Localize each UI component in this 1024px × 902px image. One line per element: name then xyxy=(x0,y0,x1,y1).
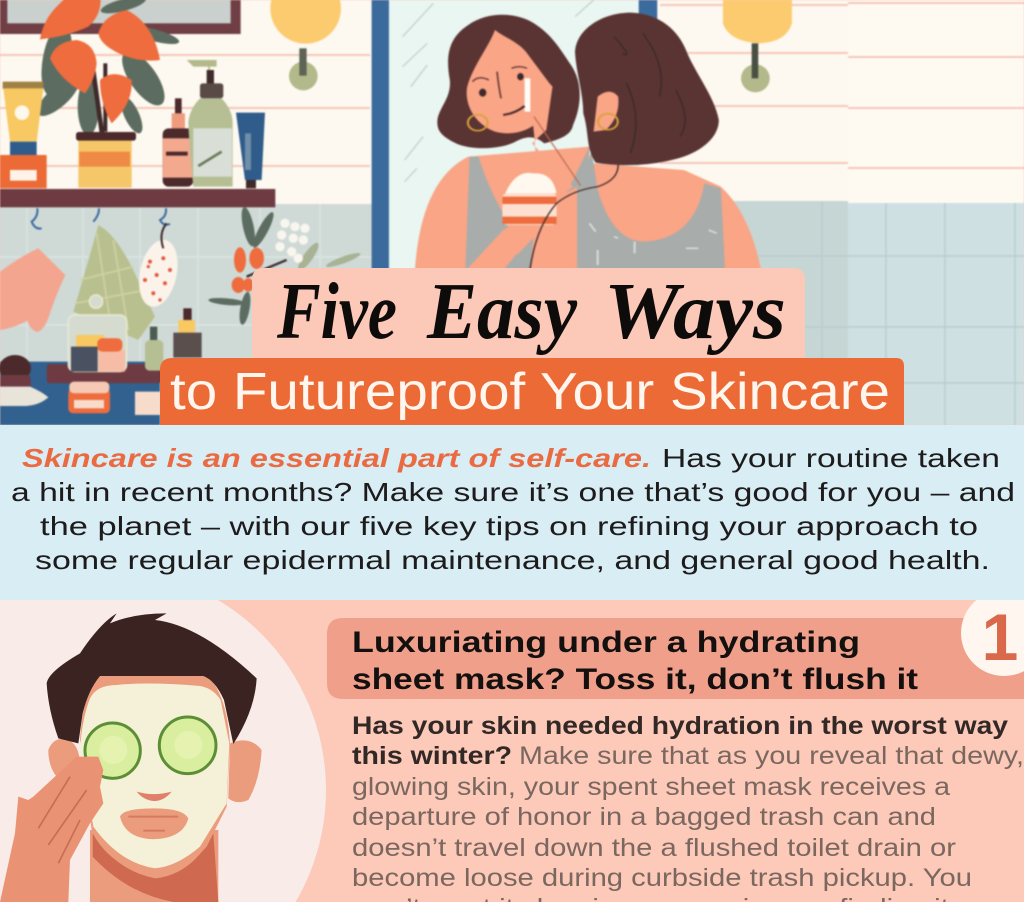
pink bath mitt xyxy=(0,248,65,332)
tray xyxy=(47,364,162,383)
panel: tip 1 sheet mask xyxy=(0,569,1024,902)
number badge xyxy=(961,600,1024,676)
intro text xyxy=(11,443,1015,575)
tip heading: sheet mask? Toss it, don’t flush it xyxy=(352,663,918,696)
panel: intro band xyxy=(0,425,1024,600)
tip body text: this winter? xyxy=(352,742,512,770)
tip heading: Luxuriating under a hydrating xyxy=(352,626,860,659)
heading bar xyxy=(327,618,1024,699)
intro text: some regular epidermal maintenance, and general good health. xyxy=(35,545,990,575)
icon: man with face mask and cucumbers xyxy=(0,613,262,902)
dropper bottle xyxy=(163,98,193,187)
lamp on left wall xyxy=(270,0,341,90)
subtitle text: to Futureproof Your Skincare xyxy=(170,363,890,421)
small bottles xyxy=(145,308,202,371)
small cream jar xyxy=(68,382,110,413)
mirror streaks xyxy=(403,0,594,182)
intro text: Skincare is an essential part of self-care. xyxy=(22,443,651,473)
right wall lamp xyxy=(723,0,792,92)
number badge: 1 xyxy=(982,600,1018,674)
portrait backdrop circle xyxy=(0,569,326,902)
title script text: Ways xyxy=(604,268,786,356)
round brush xyxy=(0,355,48,406)
tip body text: glowing skin, your spent sheet mask receives a xyxy=(352,773,950,801)
pump bottle xyxy=(187,60,233,187)
blue tube xyxy=(236,113,265,188)
tip body text: Make sure that as you reveal that dewy, xyxy=(519,742,1024,770)
cream tube and box xyxy=(0,82,47,188)
illustration: woman at mirror xyxy=(389,0,792,270)
reflected woman xyxy=(415,15,589,270)
mirror frame right post xyxy=(638,0,658,20)
intro text: the planet – with our five key tips on refining your approach to xyxy=(40,511,978,541)
tip body text: become loose during curbside trash pickup. You xyxy=(352,864,972,892)
loofah sponge xyxy=(138,222,178,308)
intro text: Has your routine taken xyxy=(662,443,1000,473)
green towel xyxy=(73,225,155,340)
glass jar with soaps xyxy=(68,295,127,372)
blue counter xyxy=(0,362,160,425)
title script text xyxy=(276,268,786,356)
tip body text: doesn’t travel down the a flushed toilet drain or xyxy=(352,834,956,862)
tip body text xyxy=(351,712,1024,902)
wooden shelf xyxy=(0,189,275,207)
tip body text: Has your skin needed hydration in the worst way xyxy=(352,712,1008,740)
illustration: shelf with plant and cosmetics xyxy=(0,0,389,425)
potted anthurium plant xyxy=(32,0,181,188)
tip body text: departure of honor in a bagged trash can and xyxy=(352,803,936,831)
hero illustration: bathroom background xyxy=(0,0,1024,425)
title script text: Five xyxy=(276,268,397,356)
title block xyxy=(160,268,904,425)
title pink banner xyxy=(252,268,805,358)
title script text: Easy xyxy=(426,268,577,356)
mirror glass xyxy=(389,0,640,270)
intro text: a hit in recent months? Make sure it’s one that’s good for you – and xyxy=(11,477,1015,507)
subtitle orange banner xyxy=(160,358,904,425)
mirror frame left post xyxy=(372,0,389,270)
wall mirror xyxy=(0,0,241,34)
white box xyxy=(135,392,160,415)
tip heading xyxy=(353,630,918,694)
woman seen from behind xyxy=(530,13,761,270)
flower bouquet xyxy=(208,206,362,326)
hanging hooks xyxy=(32,208,170,229)
